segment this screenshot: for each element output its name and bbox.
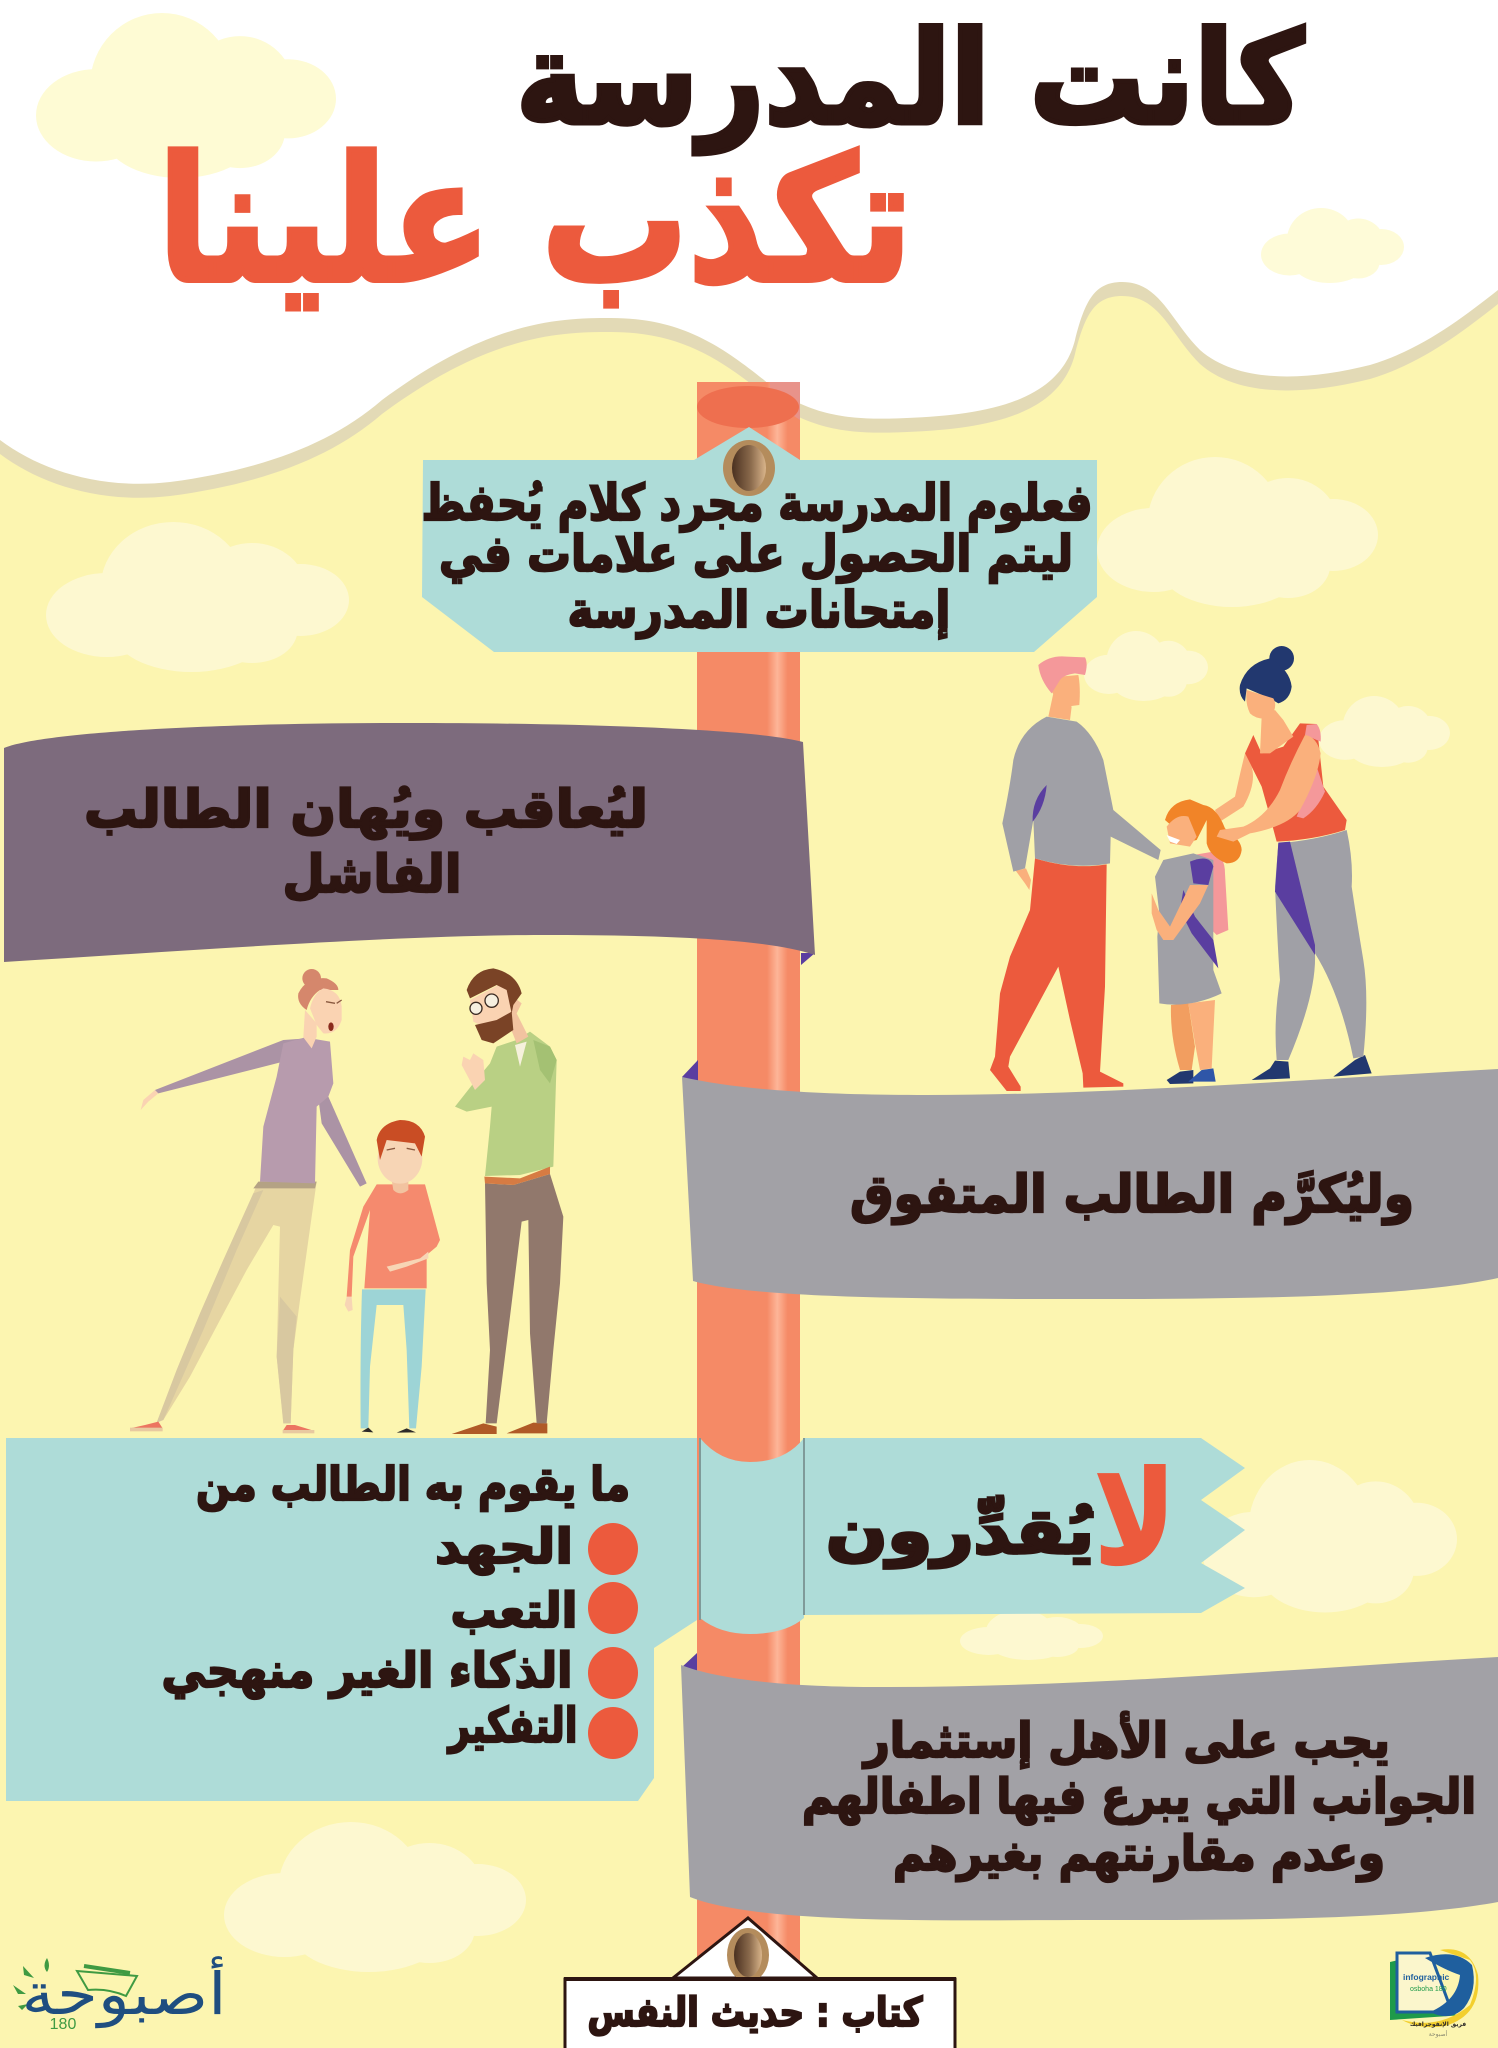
list items: التعب — [450, 1583, 578, 1639]
sign text: ليتم الحصول على علامات في — [439, 525, 1073, 584]
title line 1: كانت المدرسة — [516, 5, 1305, 154]
mother — [130, 969, 367, 1433]
banner text — [84, 780, 648, 905]
wave shadow — [0, 14, 1498, 498]
logo: infographic team — [1390, 1949, 1478, 2038]
man — [990, 656, 1161, 1091]
sign text: إمتحانات المدرسة — [568, 581, 950, 640]
logo: infographic team: osboha 180 — [1410, 1986, 1447, 1993]
woman — [1215, 646, 1372, 1080]
panel: honor banner — [682, 1069, 1498, 1299]
logo: Osboha 180: 180 — [50, 2016, 76, 2033]
banner text — [802, 1711, 1476, 1882]
list items: التفكير — [447, 1698, 578, 1754]
banner text: ليُعاقب ويُهان الطالب — [84, 780, 648, 840]
boy — [345, 1120, 440, 1433]
panel: parents advice banner — [681, 1657, 1498, 1920]
list bullets — [588, 1523, 638, 1759]
figures: scolding family — [130, 968, 563, 1434]
icon: ribbon fold — [682, 1060, 698, 1082]
panel: source sign — [564, 1918, 956, 2048]
banner text: وليُكرَّم الطالب المتفوق — [850, 1165, 1414, 1225]
list items — [162, 1519, 578, 1754]
sign text — [422, 474, 1092, 640]
cloud: top left — [36, 13, 336, 178]
sign text: فعلوم المدرسة مجرد كلام يُحفظ — [422, 474, 1092, 533]
source text: كتاب : حديث النفس — [588, 1990, 923, 2036]
arrow text dark: يُقدِّرون — [826, 1495, 1094, 1568]
cloud: behind man — [1084, 631, 1208, 701]
banner text: الفاشل — [282, 845, 462, 905]
icon: ribbon fold — [681, 1653, 697, 1672]
logo: infographic team: infographic — [1403, 1972, 1450, 1982]
cloud: bottom left — [224, 1822, 526, 1972]
header white wave — [0, 0, 1498, 484]
panel: top hanging sign — [422, 427, 1097, 652]
list heading: ما يقوم به الطالب من — [196, 1457, 630, 1511]
banner text: يجب على الأهل إستثمار — [862, 1711, 1390, 1769]
cloud: right of top sign — [1097, 457, 1378, 607]
logo: infographic team: فريق الإنفوجرافيك — [1410, 2021, 1466, 2028]
figures: happy family — [990, 646, 1372, 1091]
cloud: below arrow — [960, 1610, 1103, 1660]
cloud: left — [46, 522, 349, 672]
list items: الذكاء الغير منهجي — [162, 1643, 572, 1699]
banner text: وعدم مقارنتهم بغيرهم — [893, 1826, 1385, 1882]
panel: arrow sign — [804, 1438, 1245, 1615]
cloud: top right — [1261, 208, 1404, 283]
panel: punishment banner — [4, 723, 815, 962]
list items: الجهد — [435, 1519, 573, 1575]
arrow text red: لا — [1094, 1445, 1176, 1594]
cloud: behind woman — [1319, 696, 1450, 767]
signpost pole — [697, 382, 800, 1982]
cloud: behind arrow — [1203, 1460, 1457, 1612]
girl — [1152, 799, 1242, 1084]
logo: Osboha 180: أصبوحة — [22, 1956, 226, 2029]
panel: effort list — [6, 1438, 697, 1801]
pole wrap band — [700, 1438, 804, 1634]
title — [158, 5, 1305, 321]
logo: infographic team: أصبوحة — [1429, 2030, 1448, 2038]
father — [452, 968, 563, 1434]
title line 2: تكذب علينا — [158, 120, 912, 321]
icon: purple ribbon fold — [801, 953, 815, 965]
